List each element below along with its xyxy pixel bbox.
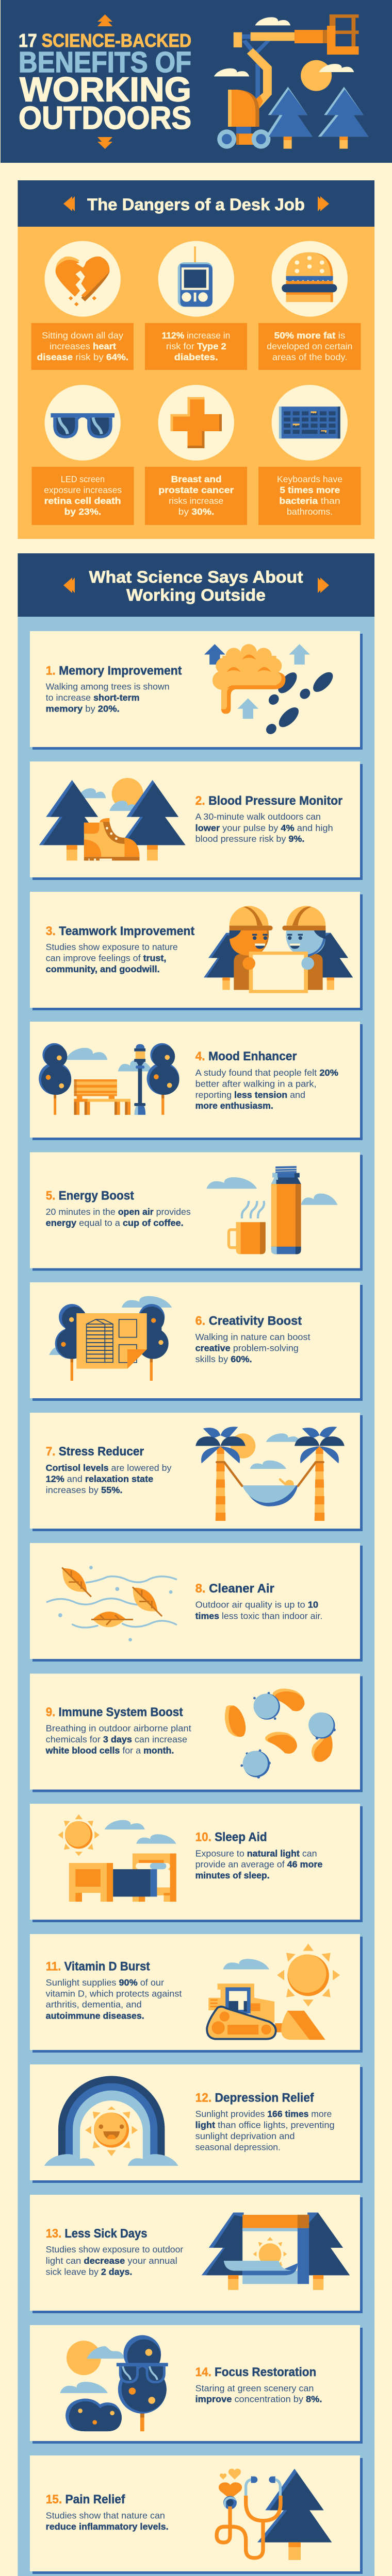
card title: 4. Mood Enhancer <box>195 1049 297 1063</box>
heading bar <box>18 553 374 617</box>
title: BENEFITS OF <box>19 46 191 79</box>
panel: The Dangers of a Desk Job <box>18 180 374 539</box>
illustration: tree wearing sunglasses <box>60 2335 168 2431</box>
text box: developed on certain <box>267 341 353 351</box>
text box: by 23%. <box>64 506 101 517</box>
illustration: two workers holding a sign <box>204 906 353 993</box>
heading bar: Working Outside <box>126 586 266 604</box>
text box <box>258 467 361 525</box>
card text: light can decrease your annual <box>46 2256 177 2266</box>
card title: 6. Creativity Boost <box>195 1314 302 1328</box>
text box: by 30%. <box>178 506 214 517</box>
illustration: boot between trees <box>39 778 186 860</box>
card text: Exposure to natural light can <box>195 1848 317 1858</box>
card text: better after walking in a park, <box>195 1079 317 1089</box>
illustration: stethoscope and tree <box>217 2469 332 2560</box>
card text: arthritis, dementia, and <box>46 1999 142 2010</box>
item: keyboards <box>258 385 361 525</box>
icon: broken heart <box>45 241 121 317</box>
card text: Studies show that nature can <box>46 2511 165 2521</box>
card text: 20 minutes in the open air provides <box>46 1207 191 1217</box>
card title: 3. Teamwork Improvement <box>46 924 194 938</box>
card text: times less toxic than indoor air. <box>195 1611 322 1621</box>
card title: 8. Cleaner Air <box>195 1582 274 1596</box>
card text: skills by 60%. <box>195 1354 252 1364</box>
icon: sunglasses <box>45 385 121 461</box>
card 1: Memory Improvement <box>30 631 363 750</box>
card text: Staring at green scenery can <box>195 2383 314 2394</box>
illustration: thermos and mug <box>206 1166 337 1254</box>
icon: burger <box>272 241 348 317</box>
panel: What Science Says About Working Outside <box>18 553 374 2576</box>
illustration: hammock between palm trees <box>195 1427 345 1521</box>
illustration: park bench and trees <box>39 1043 179 1115</box>
card text: light than office lights, preventing <box>195 2120 335 2130</box>
card text: A 30-minute walk outdoors can <box>195 811 321 822</box>
card 10: Sleep Aid <box>30 1804 363 1922</box>
card 15: Pain Relief <box>30 2455 363 2574</box>
illustration: smiling sun under a rainbow <box>44 2076 178 2166</box>
card 6: Creativity Boost <box>30 1282 363 1401</box>
card text: Cortisol levels are lowered by <box>46 1463 172 1473</box>
card title: 2. Blood Pressure Monitor <box>195 794 342 808</box>
card text <box>195 1600 322 1621</box>
card text: provide an average of 46 more <box>195 1859 323 1870</box>
item: fat <box>258 241 361 370</box>
heading bar <box>18 180 374 227</box>
text box: Keyboards have <box>277 474 342 484</box>
card 13: Less Sick Days <box>30 2195 363 2313</box>
card text: minutes of sleep. <box>195 1870 270 1880</box>
text box <box>258 323 361 370</box>
card 11: Vitamin D Burst <box>30 1934 363 2053</box>
card text <box>195 1332 311 1364</box>
card text: more enthusiasm. <box>195 1100 273 1111</box>
text box <box>32 467 134 525</box>
icon: down arrow <box>97 137 112 149</box>
hero header panel <box>1 0 392 163</box>
card text <box>46 1463 172 1495</box>
card text: improve concentration by 8%. <box>195 2394 322 2404</box>
heading bar: The Dangers of a Desk Job <box>87 195 305 214</box>
title <box>19 30 191 136</box>
item: diabetes <box>145 241 247 370</box>
card text: Walking among trees is shown <box>46 681 170 691</box>
illustration: white blood cells <box>225 1688 336 1778</box>
illustration: excavator with trees <box>214 14 368 149</box>
card text: white blood cells for a month. <box>45 1745 174 1756</box>
text box <box>31 323 134 370</box>
card text: Walking in nature can boost <box>195 1332 311 1342</box>
text box: bathrooms. <box>287 506 333 517</box>
illustration: brain and footprints <box>204 644 336 736</box>
card text: can improve feelings of trust, <box>46 953 166 963</box>
item: cancer <box>145 385 247 525</box>
text box: 50% more fat is <box>274 330 346 341</box>
card text: community, and goodwill. <box>46 964 160 974</box>
item: heart disease <box>31 241 134 370</box>
text box: increases heart <box>50 341 116 351</box>
card text <box>46 2511 169 2532</box>
card 5: Energy Boost <box>30 1152 363 1270</box>
card text: Outdoor air quality is up to 10 <box>195 1600 318 1610</box>
card text <box>195 2109 335 2152</box>
card text: to increase short-term <box>46 692 139 703</box>
card text <box>46 2244 183 2277</box>
title: WORKING <box>20 70 191 109</box>
title: OUTDOORS <box>19 100 191 136</box>
card text: energy equal to a cup of coffee. <box>46 1218 184 1228</box>
card title: 1. Memory Improvement <box>46 664 182 677</box>
text box: disease risk by 64%. <box>37 352 128 362</box>
item: retina <box>32 385 134 525</box>
illustration: sun and bed <box>58 1814 176 1902</box>
text box: 5 times more <box>280 485 340 495</box>
heading bar: What Science Says About <box>89 568 303 586</box>
card title: 5. Energy Boost <box>46 1189 134 1203</box>
icon: glucose meter <box>158 241 234 317</box>
card text: blood pressure risk by 9%. <box>195 834 304 844</box>
title: 17 SCIENCE-BACKED <box>19 30 191 51</box>
card title: 12. Depression Relief <box>195 2091 314 2105</box>
card text: Sunlight supplies 90% of our <box>46 1977 164 1988</box>
illustration: blueprint and trees <box>49 1296 172 1381</box>
card text: sick leave by 2 days. <box>46 2266 132 2277</box>
illustration: sun in a window between trees <box>202 2213 350 2290</box>
card title: 11. Vitamin D Burst <box>46 1959 150 1973</box>
card 7: Stress Reducer <box>30 1413 363 1531</box>
card text: chemicals for 3 days can increase <box>46 1734 187 1744</box>
card title: 10. Sleep Aid <box>195 1830 267 1844</box>
text box: prostate cancer <box>158 485 234 495</box>
card 3: Teamwork Improvement <box>30 892 363 1010</box>
card text <box>45 1723 191 1756</box>
card text: Sunlight provides 166 times more <box>195 2109 332 2119</box>
icon: up arrow <box>97 14 112 26</box>
card text <box>195 811 333 844</box>
card text: Studies show exposure to outdoor <box>46 2244 183 2255</box>
text box <box>145 323 247 370</box>
card text <box>46 1207 191 1228</box>
card text: reporting less tension and <box>195 1090 305 1100</box>
card 9: Immune System Boost <box>30 1673 363 1792</box>
card title: 15. Pain Relief <box>46 2493 125 2506</box>
text box: Breast and <box>171 474 222 484</box>
text box: 112% increase in <box>162 330 230 341</box>
text box: LED screen <box>61 474 105 484</box>
card text: autoimmune diseases. <box>46 2010 144 2021</box>
card title: 14. Focus Restoration <box>195 2365 316 2379</box>
illustration: bulldozer and sun <box>207 1944 340 2040</box>
text box: diabetes. <box>174 352 218 362</box>
card 4: Mood Enhancer <box>30 1022 363 1140</box>
illustration: leaves in the wind <box>47 1566 176 1641</box>
text box: exposure increases <box>44 485 122 495</box>
icon: keyboard <box>272 385 348 461</box>
text box: areas of the body. <box>272 352 347 362</box>
card text: sunlight deprivation and <box>195 2131 295 2141</box>
card text: A study found that people felt 20% <box>195 1067 338 1078</box>
card text: increases by 55%. <box>46 1485 122 1495</box>
card text: creative problem-solving <box>195 1343 299 1353</box>
card text: seasonal depression. <box>195 2142 281 2152</box>
card text: vitamin D, which protects against <box>46 1988 182 1998</box>
icon: medical cross <box>158 385 234 461</box>
card 12: Depression Relief <box>30 2064 363 2183</box>
card title: 13. Less Sick Days <box>46 2227 148 2241</box>
card title: 7. Stress Reducer <box>46 1445 144 1459</box>
text box <box>145 467 247 525</box>
card 2: Blood Pressure Monitor <box>30 761 363 880</box>
card text: reduce inflammatory levels. <box>46 2521 169 2532</box>
card title: 9. Immune System Boost <box>46 1705 183 1719</box>
card text <box>195 1848 323 1880</box>
card text: 12% and relaxation state <box>46 1473 153 1484</box>
text box: Sitting down all day <box>42 330 123 341</box>
card text <box>46 1977 182 2021</box>
card 14: Focus Restoration <box>30 2325 363 2444</box>
text box: risks increase <box>169 496 223 506</box>
card text: lower your pulse by 4% and high <box>195 823 333 833</box>
text box: bacteria than <box>279 496 340 506</box>
card text: memory by 20%. <box>46 704 120 714</box>
text box: retina cell death <box>44 496 121 506</box>
card text: Studies show exposure to nature <box>46 942 178 952</box>
card text: Breathing in outdoor airborne plant <box>46 1723 191 1733</box>
card 8: Cleaner Air <box>30 1543 363 1662</box>
card text <box>195 1067 338 1111</box>
text box: risk for Type 2 <box>166 341 226 351</box>
card text <box>46 681 170 714</box>
card text <box>195 2383 322 2404</box>
card text <box>46 942 178 974</box>
